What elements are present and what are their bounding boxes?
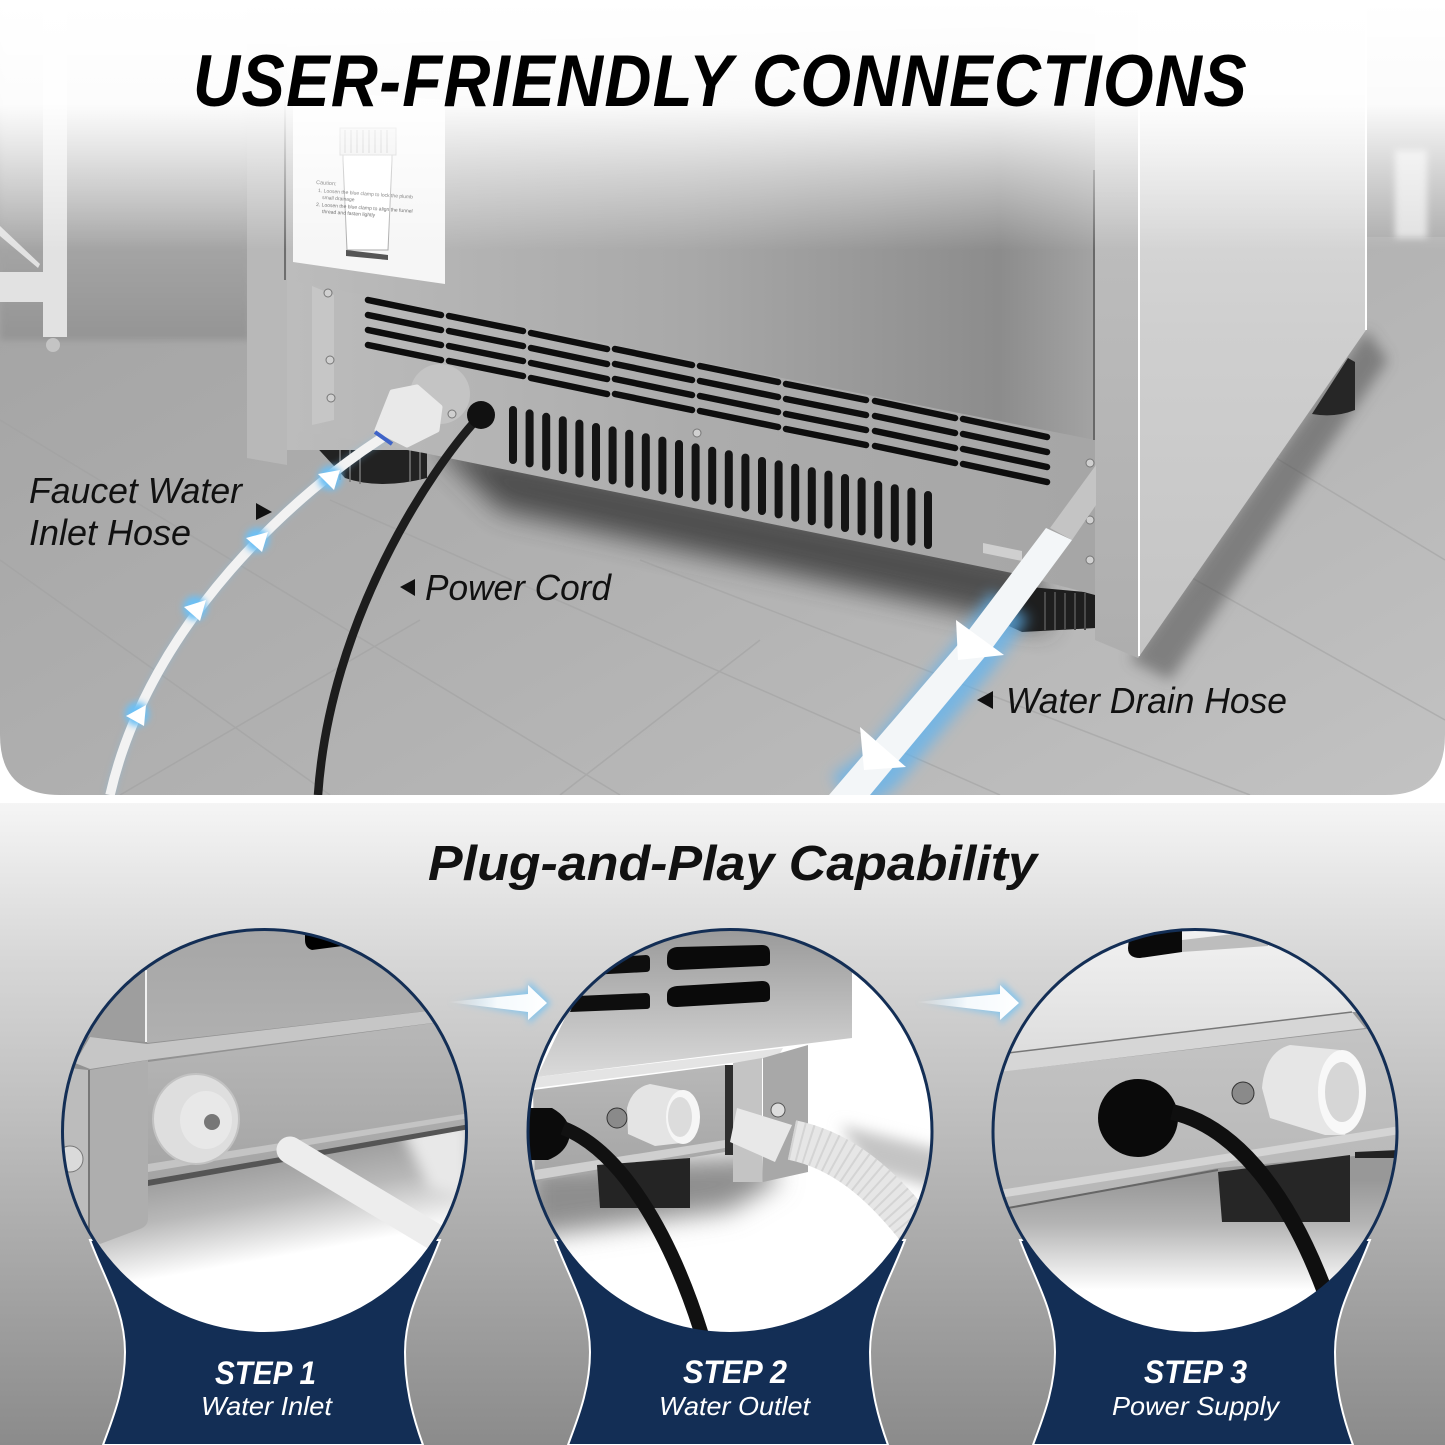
right background table leg xyxy=(1395,150,1427,238)
front lower panel xyxy=(408,371,1095,595)
sticker xyxy=(293,116,445,284)
connector ring xyxy=(410,364,470,424)
hose: faucet water inlet xyxy=(110,387,440,795)
circle photo: water inlet xyxy=(57,928,470,1338)
hose: water drain xyxy=(829,465,1096,795)
right background wall xyxy=(1432,234,1445,236)
circle outline xyxy=(528,930,932,1334)
screws xyxy=(324,289,1094,564)
sticker: Caution: xyxy=(316,180,337,187)
step label: Power Supply xyxy=(1112,1391,1281,1421)
left foot xyxy=(319,450,427,484)
lower vent slots xyxy=(513,410,928,545)
shadow beneath machine xyxy=(430,440,1050,630)
label: power cord xyxy=(400,574,612,600)
label: faucet water inlet hose: Inlet Hose xyxy=(29,512,191,553)
subheading: Plug-and-Play Capability xyxy=(428,837,1040,891)
power cord xyxy=(318,401,495,795)
floor xyxy=(0,125,1445,795)
side panel xyxy=(1138,124,1366,658)
title: USER-FRIENDLY CONNECTIONS xyxy=(193,41,1248,122)
label: faucet water inlet hose: Faucet Water xyxy=(29,470,244,511)
label: water drain hose: Water Drain Hose xyxy=(1006,680,1287,721)
left bracket of front panel xyxy=(312,286,334,425)
right machine edge xyxy=(1095,142,1138,658)
step label xyxy=(659,1354,812,1421)
circle outline xyxy=(62,930,466,1334)
step label xyxy=(1112,1354,1281,1421)
inlet flow arrows xyxy=(125,466,342,726)
upper vent slots xyxy=(368,300,1047,482)
circle photo: water outlet xyxy=(525,925,940,1338)
background wall xyxy=(0,160,247,340)
background table xyxy=(0,128,67,352)
step label: STEP 3 xyxy=(1144,1354,1247,1390)
panel edges xyxy=(285,100,1094,440)
floor tile lines xyxy=(120,458,1445,795)
circle photo: power supply xyxy=(990,928,1400,1338)
step label: STEP 1 xyxy=(215,1355,316,1391)
shadow beside side panel xyxy=(1130,330,1388,680)
step 2 card xyxy=(525,925,940,1445)
step label: Water Outlet xyxy=(659,1391,812,1421)
navy base xyxy=(555,1240,905,1445)
panel: machine photo with connections xyxy=(0,101,1445,795)
circle outline xyxy=(993,930,1397,1334)
side panel highlights xyxy=(1138,112,1367,656)
step label xyxy=(201,1355,334,1421)
sticker: small drainage xyxy=(322,195,355,203)
top white fade xyxy=(0,0,1445,250)
label: faucet water inlet hose xyxy=(30,478,272,546)
far foot xyxy=(1312,358,1355,415)
left leg xyxy=(247,156,287,465)
sticker: 2. Loosen the blue clamp to align the funnel xyxy=(316,202,413,215)
navy base xyxy=(1020,1240,1370,1445)
step label: Water Inlet xyxy=(201,1391,334,1421)
navy base xyxy=(90,1240,440,1445)
arrow: step 2 to step 3 xyxy=(915,980,1023,1025)
lower background panel xyxy=(0,803,1445,1445)
right foot xyxy=(1009,587,1096,632)
step 3 card xyxy=(990,928,1400,1445)
arrow: step 1 to step 2 xyxy=(447,980,551,1025)
machine back panel xyxy=(287,134,1095,450)
outlet label plate xyxy=(983,543,1022,561)
label: water drain hose xyxy=(977,686,1286,714)
step label: STEP 2 xyxy=(683,1354,787,1390)
step 1 card xyxy=(57,928,470,1445)
sticker: 1. Loosen the blue clamp to lock the plumb xyxy=(318,188,413,201)
sticker: thread and fasten lightly xyxy=(322,209,376,219)
label: power cord: Power Cord xyxy=(425,567,612,608)
